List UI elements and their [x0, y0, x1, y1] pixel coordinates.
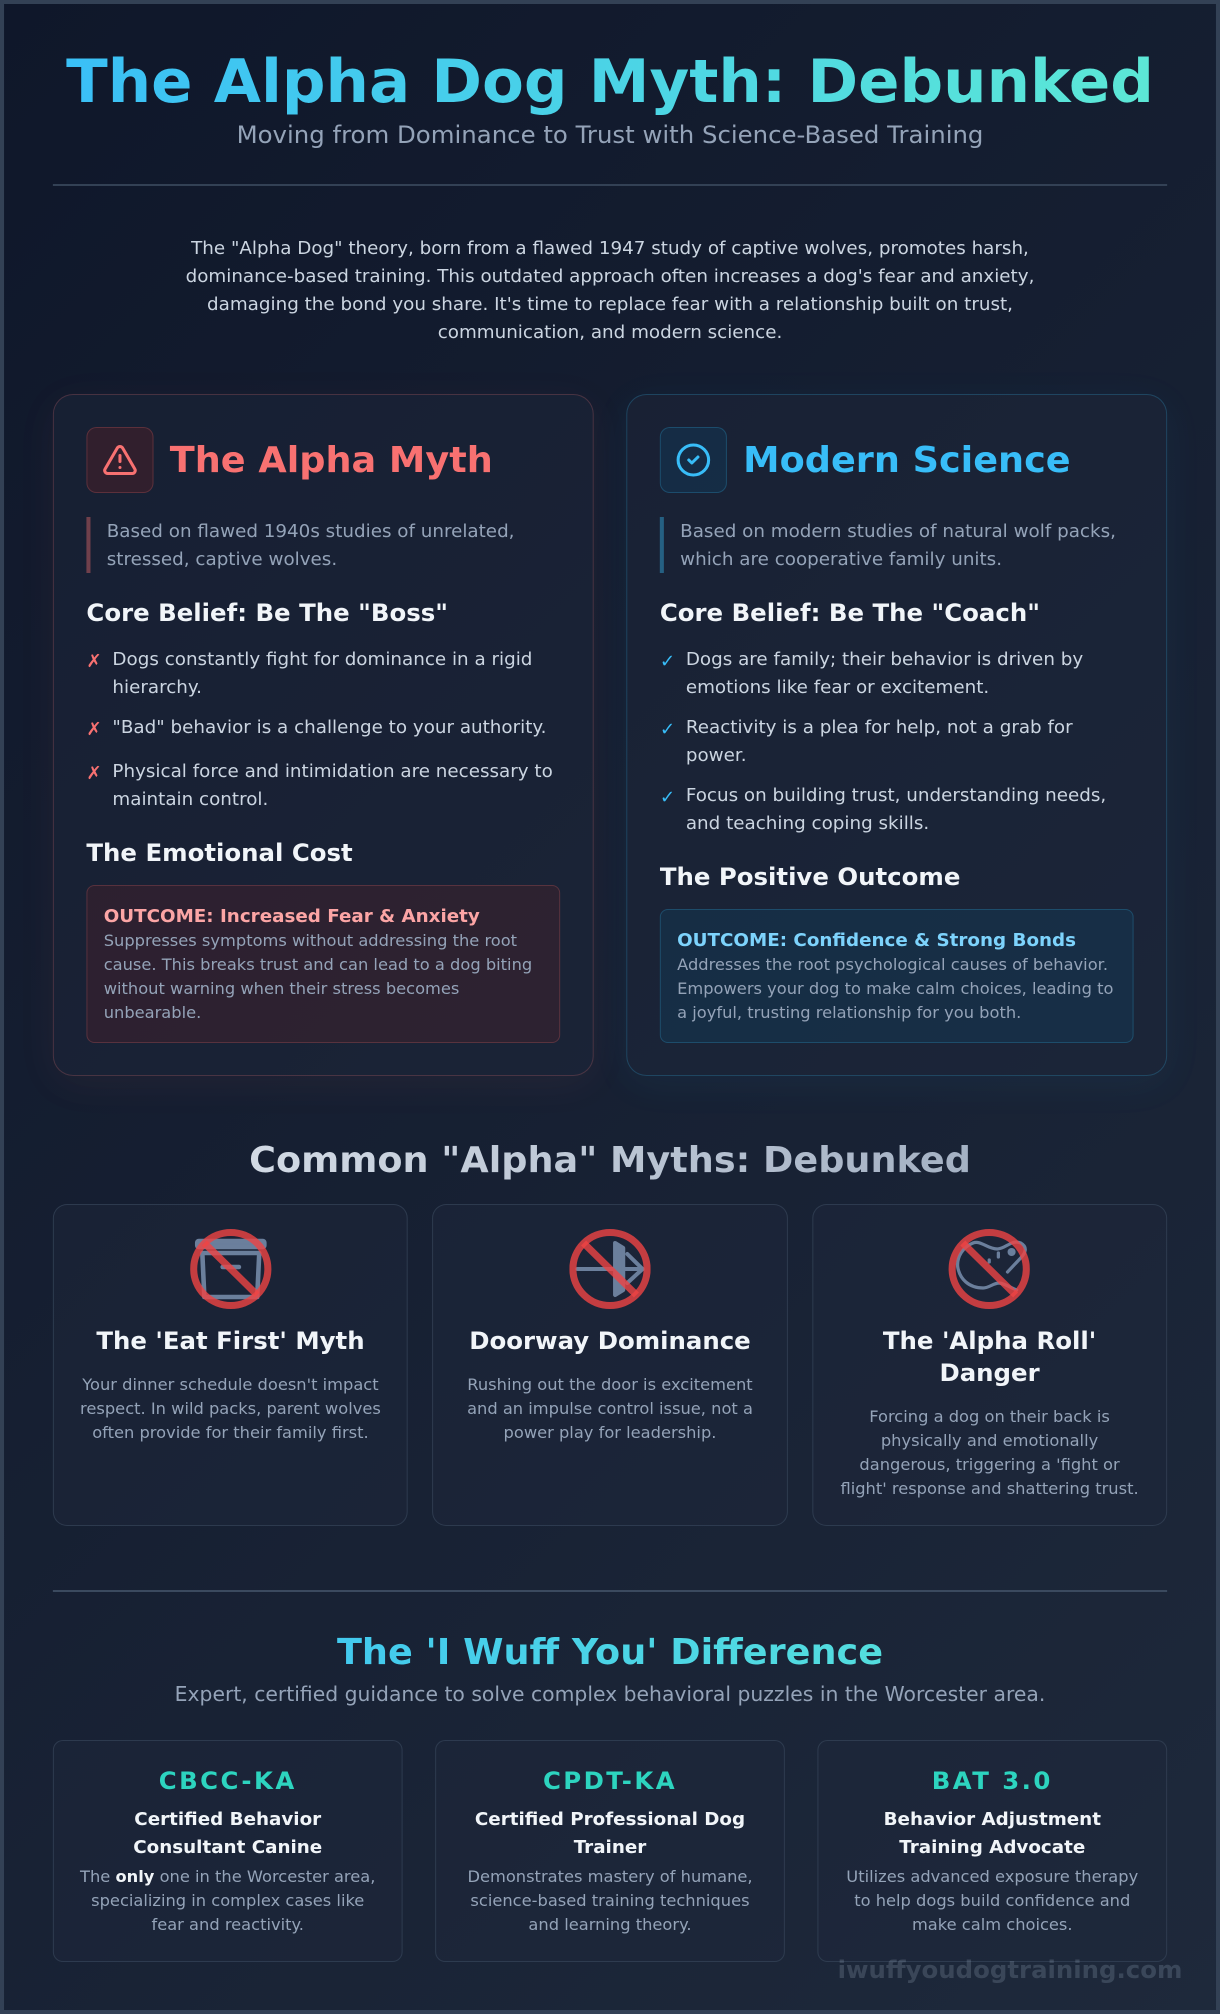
outcome callout: Addresses the root psychological causes of behavior.	[677, 955, 1108, 974]
card: eat first myth	[53, 1204, 408, 1526]
list item: Reactivity is a plea for help, not a grab for	[686, 717, 1073, 738]
list item	[660, 649, 1083, 698]
card text: respect. In wild packs, parent wolves	[80, 1399, 381, 1418]
credential description	[80, 1867, 375, 1934]
icon: check circle	[660, 427, 727, 493]
credential card: BAT 3.0	[817, 1740, 1167, 1962]
list item: ✓	[660, 651, 675, 672]
card title: Doorway Dominance	[469, 1327, 751, 1355]
section subtitle: Expert, certified guidance to solve complex behavioral puzzles in the Worcester area.	[175, 1682, 1045, 1706]
credential description: science-based training techniques	[470, 1891, 750, 1910]
list item: ✗	[86, 651, 102, 672]
card text: power play for leadership.	[504, 1423, 716, 1442]
credential name	[884, 1809, 1101, 1858]
origin quote	[86, 517, 560, 573]
credential name	[133, 1809, 322, 1858]
list item	[660, 717, 1073, 766]
credential description: Utilizes advanced exposure therapy	[846, 1867, 1138, 1886]
credential description: The only one in the Worcester area,	[80, 1867, 375, 1886]
title: The Alpha Dog Myth: Debunked	[66, 47, 1154, 117]
list item: emotions like fear or excitement.	[686, 677, 989, 698]
card title: The 'Alpha Roll'	[883, 1327, 1096, 1355]
card text	[840, 1407, 1139, 1498]
section heading: myths	[0, 1137, 1220, 1185]
panel: the alpha myth	[53, 394, 594, 1076]
card: alpha roll danger	[812, 1204, 1167, 1526]
list item: Dogs constantly fight for dominance in a rigid	[112, 649, 532, 670]
list item: ✗	[86, 763, 102, 784]
list item: ✓	[660, 787, 675, 808]
card: doorway dominance	[432, 1204, 788, 1526]
card text	[80, 1375, 381, 1442]
credential description: to help dogs build confidence and	[854, 1891, 1130, 1910]
credential card: CPDT-KA	[435, 1740, 785, 1962]
card text: dangerous, triggering a 'fight or	[859, 1455, 1120, 1474]
credential name: Certified Behavior	[134, 1809, 321, 1830]
credential description: make calm choices.	[912, 1915, 1073, 1934]
credential description: and learning theory.	[528, 1915, 692, 1934]
credential card: CBCC-KA	[53, 1740, 403, 1962]
credential name: Certified Professional Dog	[475, 1809, 745, 1830]
list item: maintain control.	[112, 789, 268, 810]
panel heading: Modern Science	[743, 440, 1071, 481]
list item: Focus on building trust, understanding needs,	[686, 785, 1106, 806]
credential name: Consultant Canine	[133, 1837, 322, 1858]
section heading: myths: Common "Alpha" Myths: Debunked	[249, 1140, 971, 1181]
outcome callout: OUTCOME: Increased Fear & Anxiety	[104, 906, 480, 927]
outcome callout: OUTCOME: Confidence & Strong Bonds	[677, 930, 1076, 951]
list item: and teaching coping skills.	[686, 813, 929, 834]
outcome callout	[660, 909, 1134, 1043]
credential name	[475, 1809, 745, 1858]
credential name: Training Advocate	[899, 1837, 1085, 1858]
credential description	[467, 1867, 753, 1934]
outcome callout: Suppresses symptoms without addressing the root	[104, 931, 517, 950]
credential description: specializing in complex cases like	[91, 1891, 364, 1910]
outcome callout	[86, 885, 560, 1043]
panel: modern science	[626, 394, 1167, 1076]
list item	[660, 785, 1106, 834]
origin quote: stressed, captive wolves.	[107, 549, 337, 570]
credential description	[846, 1867, 1138, 1934]
icon: prohibited dog on back	[948, 1229, 1030, 1309]
card text: and an impulse control issue, not a	[467, 1399, 753, 1418]
list item: Dogs are family; their behavior is driven by	[686, 649, 1083, 670]
card text: Your dinner schedule doesn't impact	[82, 1375, 379, 1394]
list item: "Bad" behavior is a challenge to your authority.	[112, 717, 546, 738]
emotional cost heading: The Emotional Cost	[86, 839, 353, 867]
credential name: Trainer	[574, 1837, 646, 1858]
core belief heading: Core Belief: Be The "Boss"	[86, 599, 448, 627]
list item: hierarchy.	[112, 677, 202, 698]
outcome callout: unbearable.	[104, 1003, 201, 1022]
origin quote: Based on modern studies of natural wolf packs,	[680, 521, 1116, 542]
outcome callout: without warning when their stress becomes	[104, 979, 459, 998]
intro text: dominance-based training. This outdated approach often increases a dog's fear and anxiety,	[186, 266, 1034, 287]
card title: The 'Eat First' Myth	[96, 1327, 365, 1355]
list item: Physical force and intimidation are necessary to	[112, 761, 553, 782]
list item: ✓	[660, 719, 675, 740]
panel heading: The Alpha Myth	[170, 440, 493, 481]
card text: flight' response and shattering trust.	[840, 1479, 1139, 1498]
core belief heading: Core Belief: Be The "Coach"	[660, 599, 1040, 627]
list item	[86, 761, 553, 810]
icon: prohibited doorway	[569, 1229, 651, 1309]
subtitle: Moving from Dominance to Trust with Science-Based Training	[237, 121, 983, 149]
list item	[86, 649, 532, 698]
positive outcome heading: The Positive Outcome	[660, 863, 960, 891]
icon: prohibited food bowl	[190, 1229, 272, 1309]
credential code: BAT 3.0	[932, 1767, 1053, 1795]
credential name: Behavior Adjustment	[884, 1809, 1101, 1830]
credential description: Demonstrates mastery of humane,	[467, 1867, 753, 1886]
origin quote: Based on flawed 1940s studies of unrelated,	[107, 521, 514, 542]
intro text: damaging the bond you share. It's time to replace fear with a relationship built on trust,	[207, 294, 1013, 315]
card title: Danger	[939, 1359, 1040, 1387]
card title	[883, 1327, 1096, 1387]
watermark: iwuffyoudogtraining.com	[838, 1956, 1182, 1984]
list item: power.	[686, 745, 747, 766]
origin quote	[660, 517, 1134, 573]
card text: Forcing a dog on their back is	[869, 1407, 1110, 1426]
card text: Rushing out the door is excitement	[467, 1375, 753, 1394]
credential code: CBCC-KA	[159, 1767, 297, 1795]
intro text: The "Alpha Dog" theory, born from a flawed 1947 study of captive wolves, promotes harsh,	[191, 238, 1029, 259]
credential code: CPDT-KA	[543, 1767, 677, 1795]
outcome callout: a joyful, trusting relationship for you both.	[677, 1003, 1021, 1022]
credential description: fear and reactivity.	[151, 1915, 304, 1934]
outcome callout: Empowers your dog to make calm choices, leading to	[677, 979, 1113, 998]
list item: ✗	[86, 719, 102, 740]
outcome callout: cause. This breaks trust and can lead to a dog biting	[104, 955, 532, 974]
intro text: communication, and modern science.	[438, 322, 782, 343]
section heading: difference: The 'I Wuff You' Difference	[337, 1632, 883, 1673]
icon: warning triangle	[86, 427, 154, 493]
intro text	[186, 238, 1034, 343]
section heading: difference	[0, 1629, 1220, 1677]
card text	[467, 1375, 753, 1442]
card text: physically and emotionally	[881, 1431, 1098, 1450]
origin quote: which are cooperative family units.	[680, 549, 1002, 570]
card text: often provide for their family first.	[92, 1423, 369, 1442]
